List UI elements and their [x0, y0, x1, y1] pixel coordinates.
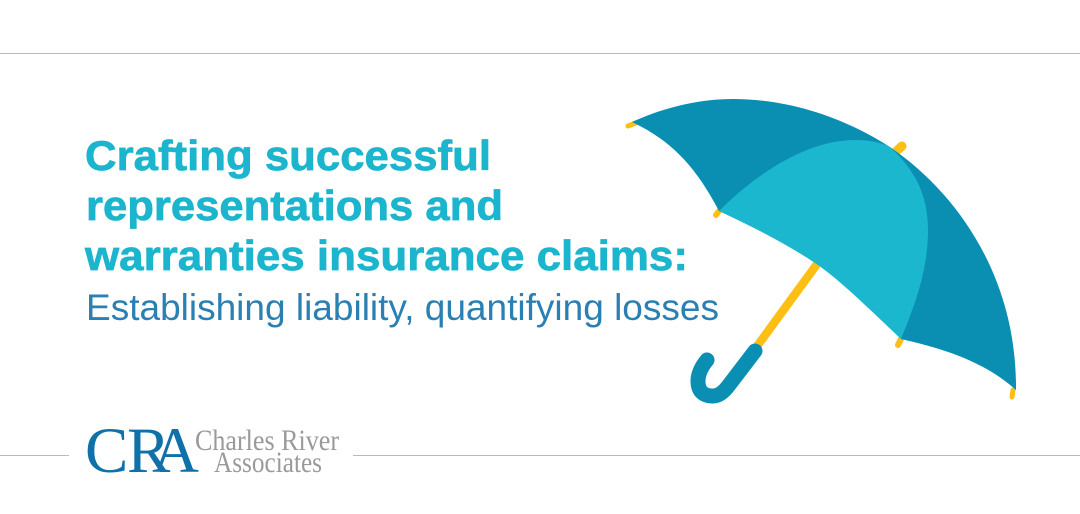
title: report heading: Crafting successful	[85, 132, 491, 179]
umbrella handle	[698, 351, 755, 396]
logo wordmark: Charles River	[195, 424, 339, 457]
logo: Charles River Associates	[85, 415, 339, 487]
icon: umbrella	[628, 99, 1016, 397]
subtitle: Establishing liability, quantifying losses	[86, 287, 719, 328]
logo: Charles River Associates: Associates	[214, 446, 322, 479]
umbrella shaft and tips	[628, 123, 1013, 397]
logo mark CRA: CRA	[85, 415, 199, 487]
umbrella canopy light panel	[719, 140, 928, 339]
title: report heading: warranties insurance claims:	[84, 232, 688, 279]
title: report heading	[84, 132, 688, 279]
title: report heading: representations and	[86, 182, 503, 229]
umbrella canopy dark panels	[632, 99, 1016, 390]
